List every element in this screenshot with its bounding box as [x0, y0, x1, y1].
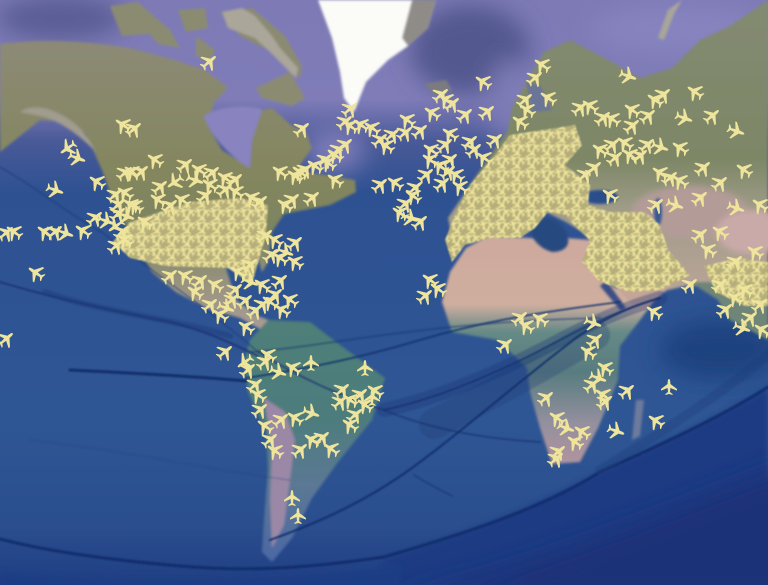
- Central Asia desert: [632, 186, 748, 238]
- planes: North America and Pacific: [0, 50, 314, 351]
- Iceland: [424, 80, 452, 96]
- planes: Africa: [493, 306, 677, 471]
- darker southern ocean: [384, 388, 768, 585]
- North America: [0, 41, 356, 330]
- dense traffic: United States: [113, 198, 268, 284]
- planes: North Atlantic corridor: [273, 70, 499, 308]
- flight corridors: [0, 167, 768, 569]
- Madagascar: [632, 400, 644, 440]
- Novaya Zemlya: [658, 0, 682, 40]
- Andes: [264, 398, 295, 548]
- Mediterranean, Black and Caspian seas: [526, 82, 662, 311]
- Greenland: [318, 0, 436, 112]
- planes: South America: [213, 340, 387, 524]
- Snow on arctic islands: [222, 8, 298, 78]
- deep water patches: [0, 0, 768, 380]
- dense traffic: Europe and Middle East: [445, 125, 690, 292]
- planes: Europe and Asia: [483, 53, 768, 342]
- Greenland east rocks: [402, 0, 436, 46]
- South America: [244, 320, 385, 562]
- India and SE Asia: [690, 282, 768, 340]
- Arabia: [612, 262, 672, 312]
- Arctic islands: [110, 2, 305, 106]
- dense traffic: South Asia: [704, 258, 768, 306]
- Eurasia: [448, 0, 768, 290]
- Hudson Bay: [204, 107, 262, 168]
- Africa: [442, 236, 662, 464]
- dark water along the bottom edge: [0, 565, 400, 585]
- Alaska range snow: [20, 107, 96, 152]
- darkest far south band: [380, 460, 768, 585]
